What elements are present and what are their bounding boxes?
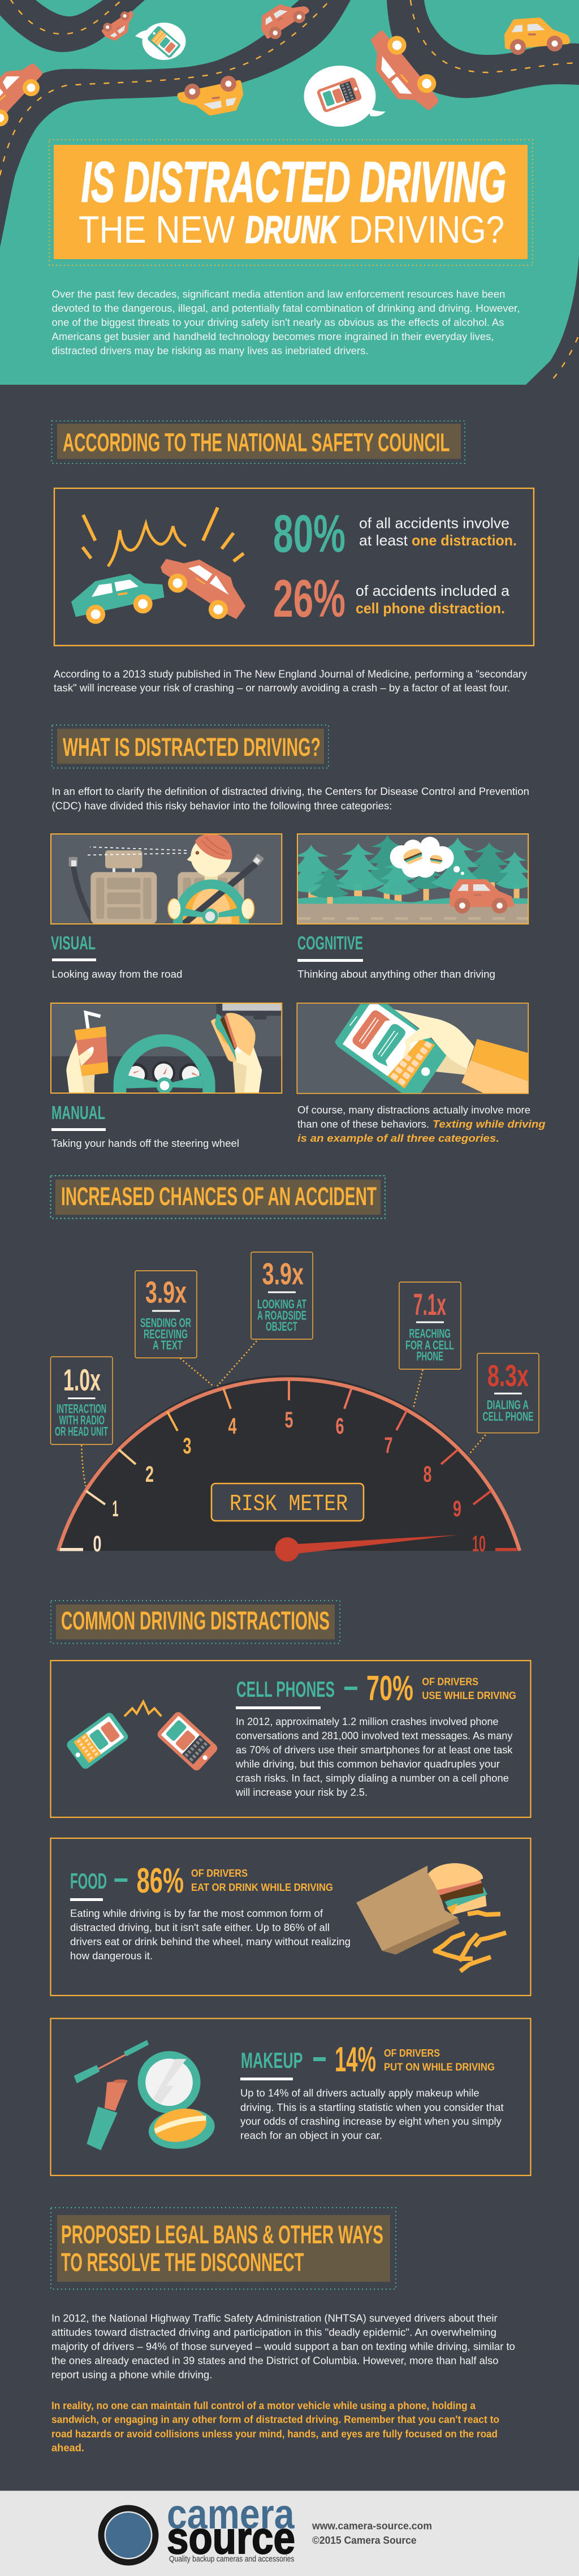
makeup text xyxy=(240,2087,504,2141)
left seat belt xyxy=(69,857,94,924)
food text: Eating while driving is by far the most common form of xyxy=(70,1907,323,1919)
label: visual: VISUAL xyxy=(51,933,96,954)
stat: 80%: of all accidents involve xyxy=(359,515,509,532)
right arm shade xyxy=(233,1061,247,1094)
large speech bubble with phone xyxy=(304,66,386,127)
stat: 26%: of accidents included a xyxy=(356,582,510,599)
heading: common driving distractions xyxy=(51,1601,340,1644)
definition paragraph: (CDC) have divided this risky behavior into the following three categories: xyxy=(51,800,392,811)
callout: 8.3x dialing phone xyxy=(477,1353,539,1433)
intro paragraph: one of the biggest threats to your driving safety isn't nearly as obvious as the effects of alcohol. As xyxy=(52,316,504,328)
cell phones heading xyxy=(236,1668,516,1709)
callout: 1.0x radio or head unit: 1.0x xyxy=(63,1364,101,1397)
cell phones text: will increase your risk by 2.5. xyxy=(235,1786,368,1798)
road dashes xyxy=(297,914,529,922)
driver shirt xyxy=(191,887,232,924)
panel: texting illustration xyxy=(297,1003,529,1094)
callout: 8.3x dialing phone: 8.3x xyxy=(487,1359,529,1393)
steering wheel and hands xyxy=(167,879,254,923)
intro paragraph: Over the past few decades, significant media attention and law enforcement resources have been xyxy=(52,288,505,300)
makeup heading: OF DRIVERS xyxy=(384,2047,440,2059)
callout: 3.9x roadside object xyxy=(251,1252,313,1339)
label: cognitive: Thinking about anything other than driving xyxy=(297,968,495,980)
cell phones heading: CELL PHONES xyxy=(236,1678,335,1702)
icon: signal zigzag xyxy=(124,1702,161,1717)
stat: 80%: 80% xyxy=(273,504,345,564)
camera source logo: source xyxy=(167,2513,295,2563)
texting panel border xyxy=(297,1003,528,1094)
food heading: 86% xyxy=(137,1861,184,1900)
gauge arc xyxy=(58,1379,520,1551)
gauge numbers: 10 xyxy=(472,1532,486,1556)
left wrist shade xyxy=(82,1075,95,1094)
gauge end bars xyxy=(60,1548,517,1551)
camera source logo: Quality backup cameras and accessories xyxy=(169,2555,294,2564)
text: all three categories xyxy=(297,1104,546,1144)
food heading: EAT OR DRINK WHILE DRIVING xyxy=(191,1881,333,1893)
title line 2: DRUNK xyxy=(245,208,340,251)
callout: 7.1x reaching for phone: 7.1x xyxy=(413,1288,446,1322)
title dotted frame xyxy=(49,140,533,265)
intro paragraph: devoted to the dangerous, illegal, and potentially fatal combination of drinking and driving. However, xyxy=(52,302,520,314)
heading: proposed legal bans: PROPOSED LEGAL BANS & OTHER WAYS xyxy=(61,2220,383,2249)
cognitive panel border xyxy=(297,834,528,924)
title line 2: THE NEW xyxy=(79,208,235,251)
callout: 7.1x reaching for phone: FOR A CELL xyxy=(405,1338,454,1352)
driver head xyxy=(187,834,232,880)
lipstick xyxy=(87,2079,128,2151)
label: visual: Looking away from the road xyxy=(51,968,182,980)
title line 2 xyxy=(79,208,504,251)
study paragraph xyxy=(54,668,528,694)
closing orange paragraph: ahead. xyxy=(51,2442,84,2454)
makeup heading: PUT ON WHILE DRIVING xyxy=(384,2061,495,2072)
gauge needle xyxy=(275,1535,458,1562)
heading: increased chances xyxy=(51,1176,385,1219)
heading: proposed legal bans xyxy=(51,2208,396,2289)
gauge numbers: 1 xyxy=(112,1496,119,1521)
manual panel border xyxy=(51,1003,282,1093)
gauge numbers: 8 xyxy=(423,1462,432,1487)
header: teal road scene xyxy=(0,0,579,385)
footer contact xyxy=(312,2521,432,2546)
callout: 3.9x sending text: SENDING OR xyxy=(140,1316,191,1330)
footer contact: www.camera-source.com xyxy=(312,2521,432,2532)
gauge numbers xyxy=(93,1408,486,1556)
cell phones heading: 70% xyxy=(366,1668,413,1708)
trunks xyxy=(308,882,520,902)
legal paragraph: In 2012, the National Highway Traffic Safety Administration (NHTSA) surveyed drivers about their xyxy=(51,2312,498,2324)
food text: drivers eat or drink behind the wheel, many without realizing xyxy=(70,1936,351,1947)
burger two xyxy=(430,855,442,865)
heading: increased chances: INCREASED CHANCES OF AN ACCIDENT xyxy=(61,1182,377,1211)
makeup heading xyxy=(240,2040,495,2080)
icon: burger in paper bag xyxy=(356,1863,487,1955)
cell phones heading: USE WHILE DRIVING xyxy=(422,1689,516,1701)
burger in hand xyxy=(211,1013,256,1063)
message bubbles xyxy=(350,1010,405,1066)
coral car xyxy=(450,879,515,914)
food text: how dangerous it. xyxy=(70,1950,153,1962)
panel: accident statistics xyxy=(54,488,534,646)
risk meter label xyxy=(211,1483,364,1521)
stat: 26%: 26% xyxy=(273,569,345,628)
yellow car, right xyxy=(504,18,570,55)
stat: 26%: cell phone distraction. xyxy=(356,600,505,617)
stat: 26% xyxy=(273,569,510,628)
risk meter label: RISK METER xyxy=(230,1491,348,1517)
sleeve xyxy=(470,1039,529,1081)
makeup text: Up to 14% of all drivers actually apply makeup while xyxy=(240,2087,479,2099)
callout: 8.3x dialing phone: CELL PHONE xyxy=(483,1409,534,1424)
phone keys xyxy=(390,1040,433,1086)
label: cognitive: COGNITIVE xyxy=(297,933,363,954)
makeup heading: 14% xyxy=(335,2040,376,2079)
heading: what is distracted driving: WHAT IS DISTRACTED DRIVING? xyxy=(63,733,321,762)
food text xyxy=(70,1907,351,1962)
cell phones text: crash risks. In fact, simply dialing a number on a cell phone xyxy=(236,1772,509,1784)
legal paragraph: report using a phone while driving. xyxy=(51,2368,213,2380)
gauge numbers: 0 xyxy=(93,1532,102,1556)
title line 2: DRIVING? xyxy=(349,208,504,251)
icon: coral phone xyxy=(155,1710,219,1773)
teal trees xyxy=(283,837,534,895)
footer background xyxy=(0,2491,579,2576)
intro paragraph xyxy=(52,288,520,356)
phone body xyxy=(335,1004,449,1094)
makeup text: driving. This is a startling statistic when you consider that xyxy=(240,2101,504,2113)
text: all three categories: Texting while driving xyxy=(433,1118,546,1130)
gauge numbers: 2 xyxy=(145,1462,154,1487)
callout: 1.0x radio or head unit: WITH RADIO xyxy=(59,1413,105,1427)
callout: 1.0x radio or head unit: INTERACTION xyxy=(57,1402,106,1416)
camera source logo: camera xyxy=(167,2491,295,2538)
cell phones heading: OF DRIVERS xyxy=(422,1676,478,1688)
road centre dashes xyxy=(0,0,579,384)
heading: according to the national safety council xyxy=(52,421,465,463)
road: top left xyxy=(0,0,145,52)
gauge numbers: 7 xyxy=(384,1433,392,1458)
label: visual xyxy=(51,933,182,980)
gauge numbers: 6 xyxy=(336,1414,344,1439)
cell phones text: conversations and 281,000 involved text messages. As many xyxy=(236,1730,513,1741)
callout: 7.1x reaching for phone xyxy=(399,1282,461,1369)
study paragraph: task" will increase your risk of crashing – or narrowly avoiding a crash – by a factor of at least four. xyxy=(54,682,510,694)
closing orange paragraph: sandwich, or engaging in any other form of distracted driving. Remember that you can't react to xyxy=(51,2414,499,2426)
leader lines xyxy=(81,1341,486,1486)
cell phones text: while driving, but this common behavior quadruples your xyxy=(235,1758,500,1770)
heading: proposed legal bans: TO RESOLVE THE DISCONNECT xyxy=(61,2248,304,2277)
icon: crash lines xyxy=(83,508,244,566)
phone screen xyxy=(343,1004,425,1076)
text: all three categories: than one of these behaviors. xyxy=(297,1118,429,1130)
callout: 1.0x radio or head unit xyxy=(51,1357,113,1444)
panel: visual illustration xyxy=(50,833,283,924)
closing orange paragraph: road hazards or avoid collisions unless your mind, hands, and eyes are fully focused on the road xyxy=(51,2428,498,2440)
text: all three categories: is an example of all three categories. xyxy=(297,1132,499,1144)
legal paragraph: majority of drivers – 94% of those surveyed – would support a ban on texting while driving, similar to xyxy=(51,2340,515,2352)
makeup text: your odds of crashing increase by eight when you simply xyxy=(240,2115,502,2127)
title block xyxy=(49,140,533,265)
road: right xyxy=(387,0,579,98)
icon: makeup set xyxy=(74,2040,217,2153)
callout: 7.1x reaching for phone: PHONE xyxy=(417,1349,443,1364)
label: manual: Taking your hands off the steering wheel xyxy=(51,1137,239,1149)
gauge face xyxy=(57,1375,521,1551)
cell phones text xyxy=(235,1715,513,1798)
label: cognitive xyxy=(297,933,495,980)
closing orange paragraph xyxy=(51,2399,499,2454)
visual panel border xyxy=(51,834,282,924)
passenger seat xyxy=(90,850,157,924)
mascara xyxy=(74,2040,149,2083)
definition paragraph: In an effort to clarify the definition of distracted driving, the Centers for Disease Control and Prevention xyxy=(51,785,529,797)
intro paragraph: distracted drivers may be risking as many lives as inebriated drivers. xyxy=(52,345,369,356)
sleeve light part xyxy=(461,1060,529,1094)
dark trees xyxy=(310,835,514,898)
big coral car, left xyxy=(0,63,42,126)
drink cup xyxy=(75,1013,109,1076)
callout: 3.9x roadside object: LOOKING AT xyxy=(257,1297,306,1311)
callout: 3.9x sending text: A TEXT xyxy=(153,1338,183,1352)
gauge ticks xyxy=(86,1379,491,1504)
callout: 8.3x dialing phone: DIALING A xyxy=(487,1397,529,1412)
panel: makeup xyxy=(51,2019,530,2175)
intro paragraph: Americans get busier and handheld technology becomes more ingrained in their everyday lives, xyxy=(52,330,494,342)
food heading: FOOD xyxy=(70,1869,107,1894)
legal paragraph: attitudes toward distracted driving and participation in this "deadly epidemic". An overwhelming xyxy=(51,2326,496,2338)
rear-view mirror xyxy=(217,1002,282,1020)
road: lower right xyxy=(526,255,579,385)
stat: 80%: one distraction. xyxy=(412,532,517,549)
phone keyboard xyxy=(387,1039,435,1089)
callout: 3.9x roadside object: 3.9x xyxy=(262,1257,304,1291)
gauge numbers: 4 xyxy=(228,1414,237,1439)
callout: 7.1x reaching for phone: REACHING xyxy=(409,1326,451,1341)
callout: 3.9x sending text: RECEIVING xyxy=(144,1327,188,1341)
home button xyxy=(421,1067,430,1076)
right hand arm xyxy=(234,1047,262,1094)
dashboard xyxy=(51,1056,282,1093)
food heading: OF DRIVERS xyxy=(191,1867,248,1879)
icon: teal phone xyxy=(65,1711,129,1771)
makeup heading: MAKEUP xyxy=(241,2049,303,2073)
food heading xyxy=(70,1861,333,1901)
closing orange paragraph: In reality, no one can maintain full control of a motor vehicle while using a phone, holding a xyxy=(51,2399,476,2411)
driver torso xyxy=(183,887,239,924)
shoulder belt xyxy=(184,853,264,924)
cell phones text: In 2012, approximately 1.2 million crashes involved phone xyxy=(236,1715,499,1727)
gauges xyxy=(128,1061,200,1082)
footer contact: ©2015 Camera Source xyxy=(312,2535,417,2546)
gauge numbers: 3 xyxy=(183,1434,191,1459)
stat: 80%: at least xyxy=(359,532,408,549)
icon: fries xyxy=(434,1912,506,1971)
ground hill xyxy=(297,896,529,904)
text: all three categories: Of course, many distractions actually involve more xyxy=(297,1104,530,1116)
left hand xyxy=(66,1042,94,1094)
heading: common driving distractions: COMMON DRIVING DISTRACTIONS xyxy=(61,1606,330,1635)
small speech bubble with phone xyxy=(135,23,185,60)
road: centre winding xyxy=(0,0,351,247)
title orange box xyxy=(54,145,528,259)
driver seat xyxy=(178,872,244,924)
label: manual: MANUAL xyxy=(51,1103,105,1124)
foreground small dark tree xyxy=(310,868,348,904)
road strip xyxy=(297,904,529,924)
icon: crashing cars xyxy=(71,559,245,624)
coral car, upper middle xyxy=(255,0,314,44)
panel: cognitive illustration xyxy=(283,834,534,924)
food text: distracted driving, but it isn't safe either. Up to 86% of all xyxy=(70,1921,330,1933)
camera source logo xyxy=(98,2491,295,2565)
panel: cell phones xyxy=(51,1661,530,1817)
small coral car, top left xyxy=(99,6,140,45)
burger one xyxy=(404,849,422,865)
gauge numbers: 9 xyxy=(453,1496,461,1521)
steering wheel xyxy=(114,1034,215,1094)
chart: risk meter gauge xyxy=(57,1375,521,1562)
teal background xyxy=(0,0,579,385)
thought bubble xyxy=(390,837,464,878)
makeup text: reach for an object in your car. xyxy=(240,2129,382,2141)
eye line of sight xyxy=(85,847,187,855)
study paragraph: According to a 2013 study published in The New England Journal of Medicine, performing a "secondary xyxy=(54,668,528,680)
definition paragraph xyxy=(51,785,529,811)
footer xyxy=(0,2491,579,2576)
gauge numbers: 5 xyxy=(285,1408,293,1433)
panel: manual illustration xyxy=(51,1002,282,1094)
compact mirror xyxy=(138,2051,201,2113)
legal paragraph xyxy=(51,2312,515,2380)
big coral car, right xyxy=(370,31,438,110)
label: manual xyxy=(51,1103,239,1149)
powder xyxy=(146,2104,217,2153)
hand shade xyxy=(435,1055,468,1075)
callout: 1.0x radio or head unit: OR HEAD UNIT xyxy=(55,1425,108,1438)
callout: 3.9x sending text xyxy=(135,1271,197,1358)
callout: 3.9x roadside object: A ROADSIDE xyxy=(257,1308,306,1323)
stat: 80% xyxy=(273,504,517,564)
hand xyxy=(394,1009,474,1069)
legal paragraph: the ones already enacted in 39 states and the District of Columbia. However, more than half also xyxy=(51,2355,499,2367)
panel: food xyxy=(51,1838,530,1996)
cell phones text: as 70% of drivers use their smartphones for at least one task xyxy=(236,1744,513,1756)
yellow car, upside down xyxy=(176,74,245,119)
callout: 3.9x sending text: 3.9x xyxy=(145,1275,187,1309)
heading: what is distracted driving xyxy=(52,725,329,768)
callout: 3.9x roadside object: OBJECT xyxy=(266,1319,297,1334)
